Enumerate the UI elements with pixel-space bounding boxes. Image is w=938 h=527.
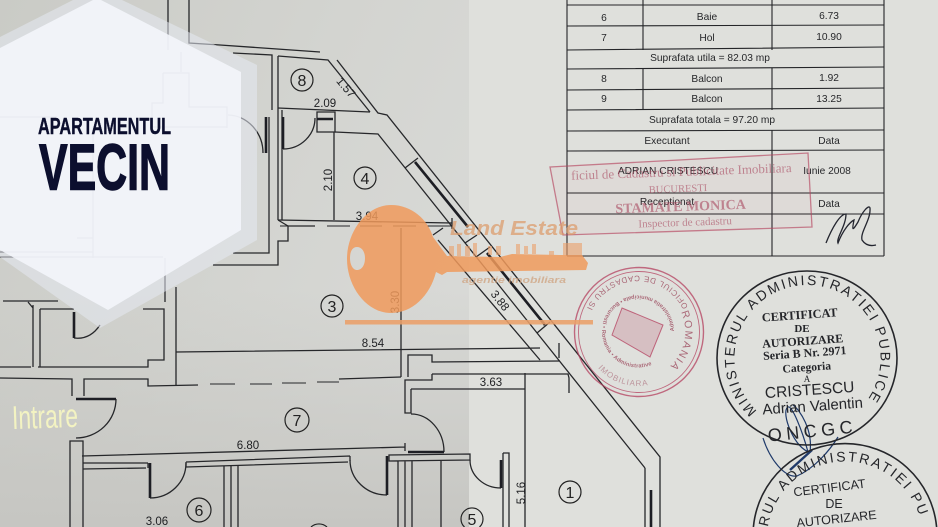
- marker: room 7: 7: [293, 413, 302, 430]
- table text: Iunie 2008: [803, 166, 851, 177]
- black round stamp: certificate: DE: [794, 323, 810, 335]
- marker: room 5: [461, 508, 483, 527]
- hexagon panel: [0, 0, 257, 328]
- blue ink scribble: [763, 405, 838, 476]
- title line 2: VECIN: [39, 130, 170, 204]
- black round stamp: certificate: Seria B Nr. 2971: [763, 343, 847, 363]
- black round stamp: certificate: ONCGC: [767, 416, 858, 446]
- marker: room 7: [285, 408, 309, 432]
- table text: Suprafata utila = 82.03 mp: [650, 53, 770, 64]
- dimension labels: 1.57: [334, 76, 357, 101]
- marker: room 8: [291, 69, 313, 91]
- black round stamp: certificate: CRISTESCU: [764, 379, 855, 402]
- red round stamp: IMOBILIARA: [598, 364, 648, 386]
- black round stamp: certificate: Adrian Valentin: [762, 395, 863, 418]
- red round stamp: OFICIUL DE CADASTRU SI: [587, 276, 688, 310]
- room number markers: [187, 69, 581, 527]
- red rectangular stamp: Inspector de cadastru: [638, 215, 733, 230]
- black round stamp: certificate: A: [804, 374, 811, 384]
- logo wordmark: Land Estate: [450, 218, 578, 240]
- dimension labels: 3.88: [488, 289, 511, 314]
- title line 1: APARTAMENTUL: [38, 113, 171, 139]
- faint lines under hexagon: [0, 52, 227, 258]
- marker: room 8: 8: [298, 73, 307, 90]
- marker: room 4: [354, 167, 376, 189]
- logo tagline: agentie imobiliara: [462, 275, 566, 286]
- outer translucent hexagon: [0, 0, 257, 328]
- dimension labels: 2.10: [323, 169, 335, 191]
- marker: room 4: 4: [361, 171, 370, 188]
- table text: 6: [601, 13, 607, 24]
- marker: room 3: [321, 295, 343, 317]
- table text: [601, 11, 851, 210]
- black round stamp: certificate: CERTIFICAT: [761, 305, 839, 325]
- signature: [826, 207, 876, 245]
- black round stamp: second certificate: CERTIFICAT: [793, 477, 867, 499]
- marker: room 1: 1: [566, 485, 575, 502]
- table text: 8: [601, 74, 607, 85]
- title: [38, 113, 171, 204]
- table text: Balcon: [691, 94, 723, 105]
- table text: 7: [601, 33, 607, 44]
- dimension labels: 3.30: [390, 291, 402, 313]
- marker: room 1: [559, 481, 581, 503]
- key base bar: [345, 320, 593, 324]
- table text: Suprafata totala = 97.20 mp: [649, 115, 775, 126]
- table text: 13.25: [816, 94, 842, 105]
- dimension labels: [146, 76, 528, 527]
- marker: room 6: [187, 498, 211, 522]
- door swings: [74, 115, 501, 498]
- red rectangular stamp: [550, 153, 812, 235]
- dimension labels: 5.16: [516, 482, 528, 504]
- red rectangular stamp: ficiul de Cadastru si Publicitate Imobiliara: [571, 160, 792, 183]
- table text: Receptionat: [640, 197, 694, 208]
- red round stamp: ROMANIA: [670, 310, 693, 369]
- dimension labels: 3.63: [480, 377, 502, 389]
- key teeth as city skyline: [449, 243, 582, 256]
- marker: room 3: 3: [328, 299, 337, 316]
- dimension labels: 6.80: [237, 440, 259, 452]
- dimension labels: 2.09: [314, 98, 336, 110]
- inner hexagon: [0, 0, 241, 310]
- thick door leaves and window glazing: [74, 117, 651, 527]
- black round stamp: second certificate: RUL ADMINISTRATIEI PU: [758, 452, 928, 526]
- table text: Balcon: [691, 74, 723, 85]
- table grid: [567, 0, 884, 256]
- red rectangular stamp: STAMATE MONICA: [615, 198, 747, 217]
- table text: Baie: [697, 12, 718, 23]
- key head and shaft: [347, 205, 588, 313]
- black round stamp: certificate: MINISTERUL ADMINISTRATIEI PUBLICE: [724, 275, 890, 417]
- red rectangular stamp: BUCURESTI: [649, 183, 708, 196]
- table text: 9: [601, 94, 607, 105]
- marker: room 6: 6: [195, 503, 204, 520]
- table text: Data: [818, 199, 840, 210]
- table text: 10.90: [816, 32, 842, 43]
- table text: 6.73: [819, 11, 839, 22]
- area table: [567, 0, 884, 256]
- label: Intrare: Intrare: [11, 397, 79, 436]
- black round stamp: certificate: AUTORIZARE: [762, 331, 844, 351]
- black round stamp: second certificate: DE: [825, 497, 843, 511]
- table text: Data: [818, 136, 840, 147]
- black round stamp: certificate: Categoria: [782, 360, 832, 376]
- logo: Land Estate key: [345, 205, 593, 324]
- table text: Executant: [644, 136, 690, 147]
- structural walls lower: [176, 287, 559, 385]
- red round stamp: Administratia municipala • Bucuresti • Romania • Administrative: [602, 294, 674, 368]
- dimension labels: 8.54: [362, 338, 385, 350]
- table text: Hol: [699, 33, 715, 44]
- table text: 1.92: [819, 73, 839, 84]
- table text: ADRIAN CRISTESCU: [618, 166, 718, 177]
- dimension labels: 3.94: [356, 211, 379, 223]
- floor plan drawing: [0, 0, 660, 527]
- red round stamp: [574, 266, 704, 398]
